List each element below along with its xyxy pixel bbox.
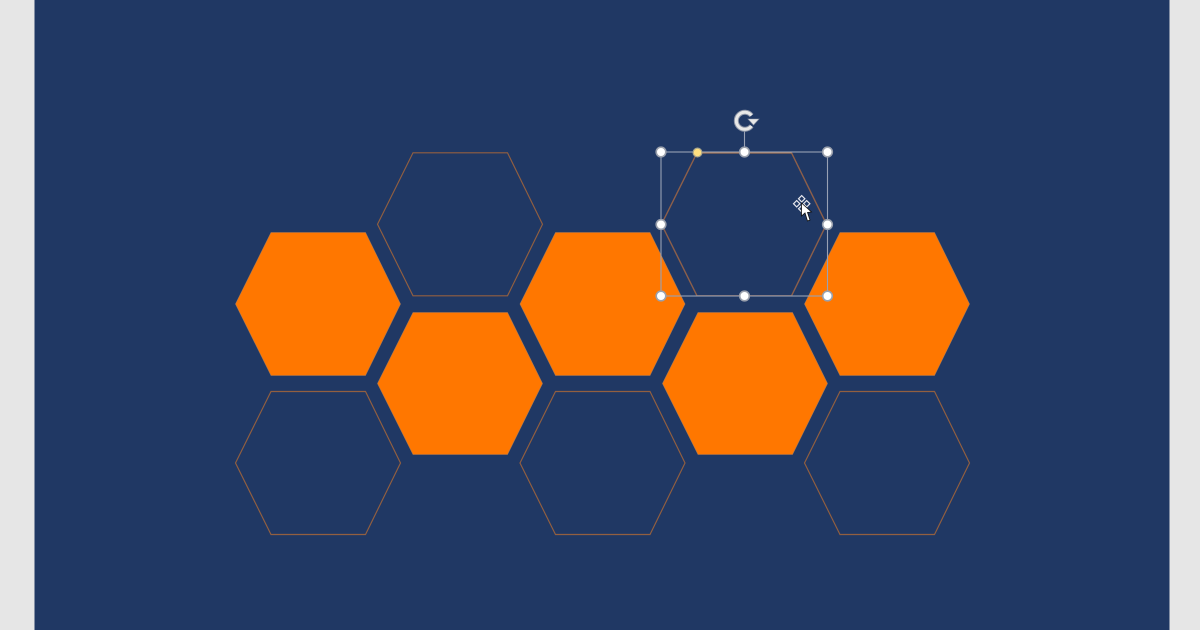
icon: rotate handle [736,112,759,129]
selected outlined hexagon [662,153,826,296]
icon: move cursor [794,196,812,221]
selection box with handles [656,130,832,301]
orange hexagons [236,232,970,454]
outlined hexagons [236,153,970,535]
